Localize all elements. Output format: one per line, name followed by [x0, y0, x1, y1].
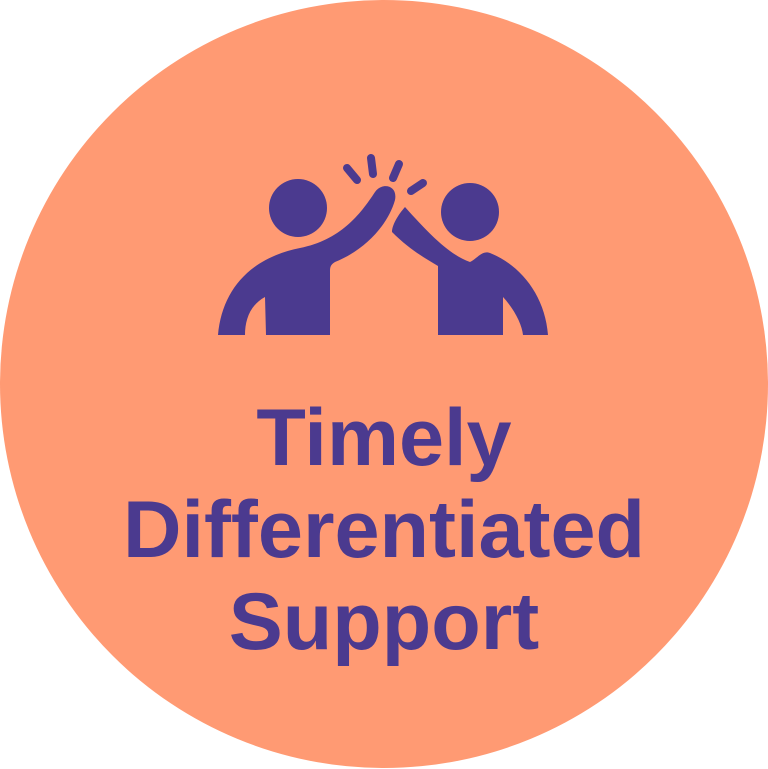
- left person: [218, 179, 395, 335]
- right person: [392, 183, 548, 335]
- title text: [123, 393, 645, 667]
- title text: Timely: [256, 393, 512, 483]
- title text: Differentiated: [123, 485, 645, 575]
- icon: sparks: [347, 158, 423, 191]
- title text: Support: [229, 577, 539, 667]
